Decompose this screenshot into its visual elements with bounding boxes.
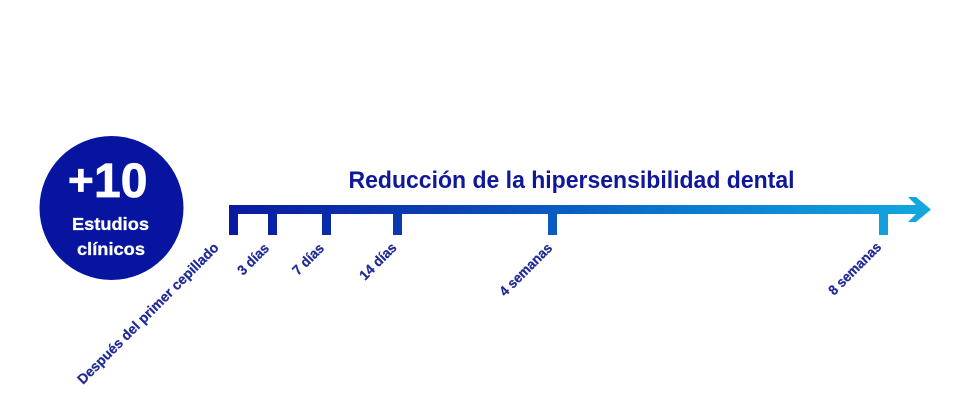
title: Reducción de la hipersensibilidad dental <box>348 167 794 194</box>
label: 4 semanas: 4 semanas <box>496 240 555 299</box>
badge: +10 estudios clínicos: 10 <box>94 155 147 208</box>
badge: +10 estudios clínicos: Estudios <box>72 214 149 234</box>
badge: +10 estudios clínicos <box>40 136 184 280</box>
label: 14 días: 14 días <box>356 239 400 283</box>
label: 8 semanas: 8 semanas <box>825 239 884 298</box>
badge: +10 estudios clínicos: clínicos <box>77 239 145 259</box>
badge: +10 estudios clínicos: + <box>68 156 94 205</box>
label: después del primer cepillado: Después del primer cepillado <box>74 239 222 387</box>
label: 3 días: 3 días <box>234 240 272 278</box>
timeline arrow with ticks <box>229 197 931 235</box>
label: 7 días: 7 días <box>289 240 327 278</box>
